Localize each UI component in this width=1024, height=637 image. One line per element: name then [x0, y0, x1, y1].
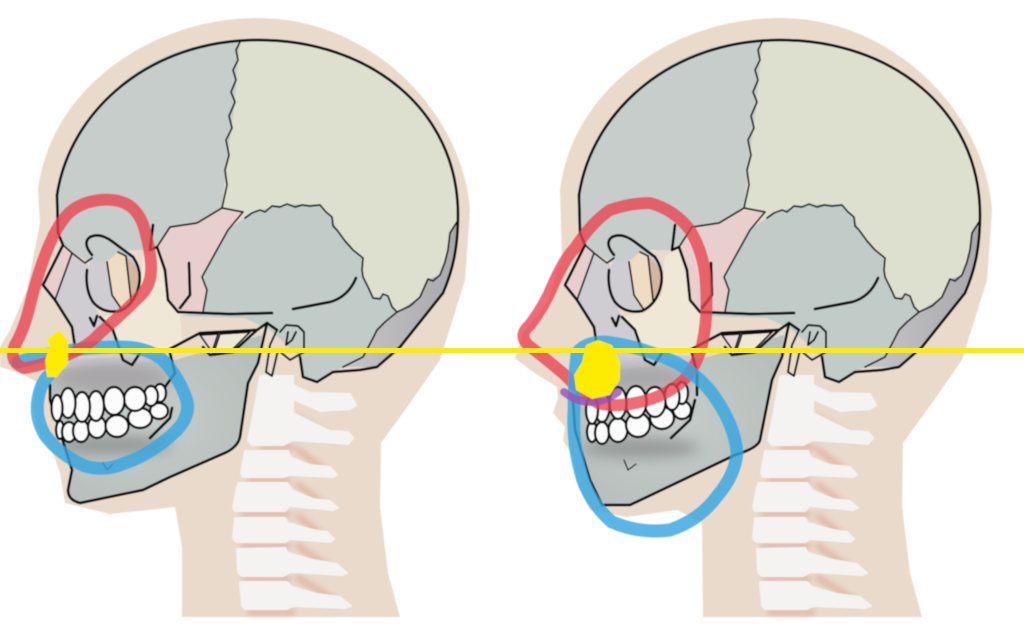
mental foramen [103, 463, 113, 470]
skin silhouette [0, 18, 470, 617]
cranium [43, 42, 458, 385]
cranium outlines [43, 40, 458, 382]
mandible [50, 335, 262, 503]
cervical vertebrae [233, 376, 356, 612]
mouth shadow [580, 366, 700, 458]
mandible outline [50, 323, 267, 503]
upper teeth [52, 384, 166, 422]
blue outline: lower jaw [18, 347, 188, 468]
yellow marker [574, 340, 620, 399]
red outline: upper face and gum [523, 203, 706, 405]
lower teeth [56, 403, 168, 442]
yellow marker [45, 330, 68, 377]
cranium outlines [565, 40, 980, 382]
skin silhouette [515, 18, 992, 617]
blue outline: lower jaw [574, 342, 737, 531]
red outline: upper face [13, 200, 151, 368]
upper teeth [586, 382, 688, 424]
left head [0, 18, 470, 617]
purple overlap mark [564, 392, 618, 402]
mandible outline [573, 323, 789, 505]
cranium [565, 42, 980, 385]
yellow horizontal reference line [0, 348, 1024, 353]
mouth shadow [52, 362, 172, 455]
cervical vertebrae [753, 376, 876, 612]
mandible [575, 335, 784, 505]
right head [515, 18, 992, 617]
lower teeth [587, 401, 691, 444]
mental foramen [624, 460, 636, 470]
